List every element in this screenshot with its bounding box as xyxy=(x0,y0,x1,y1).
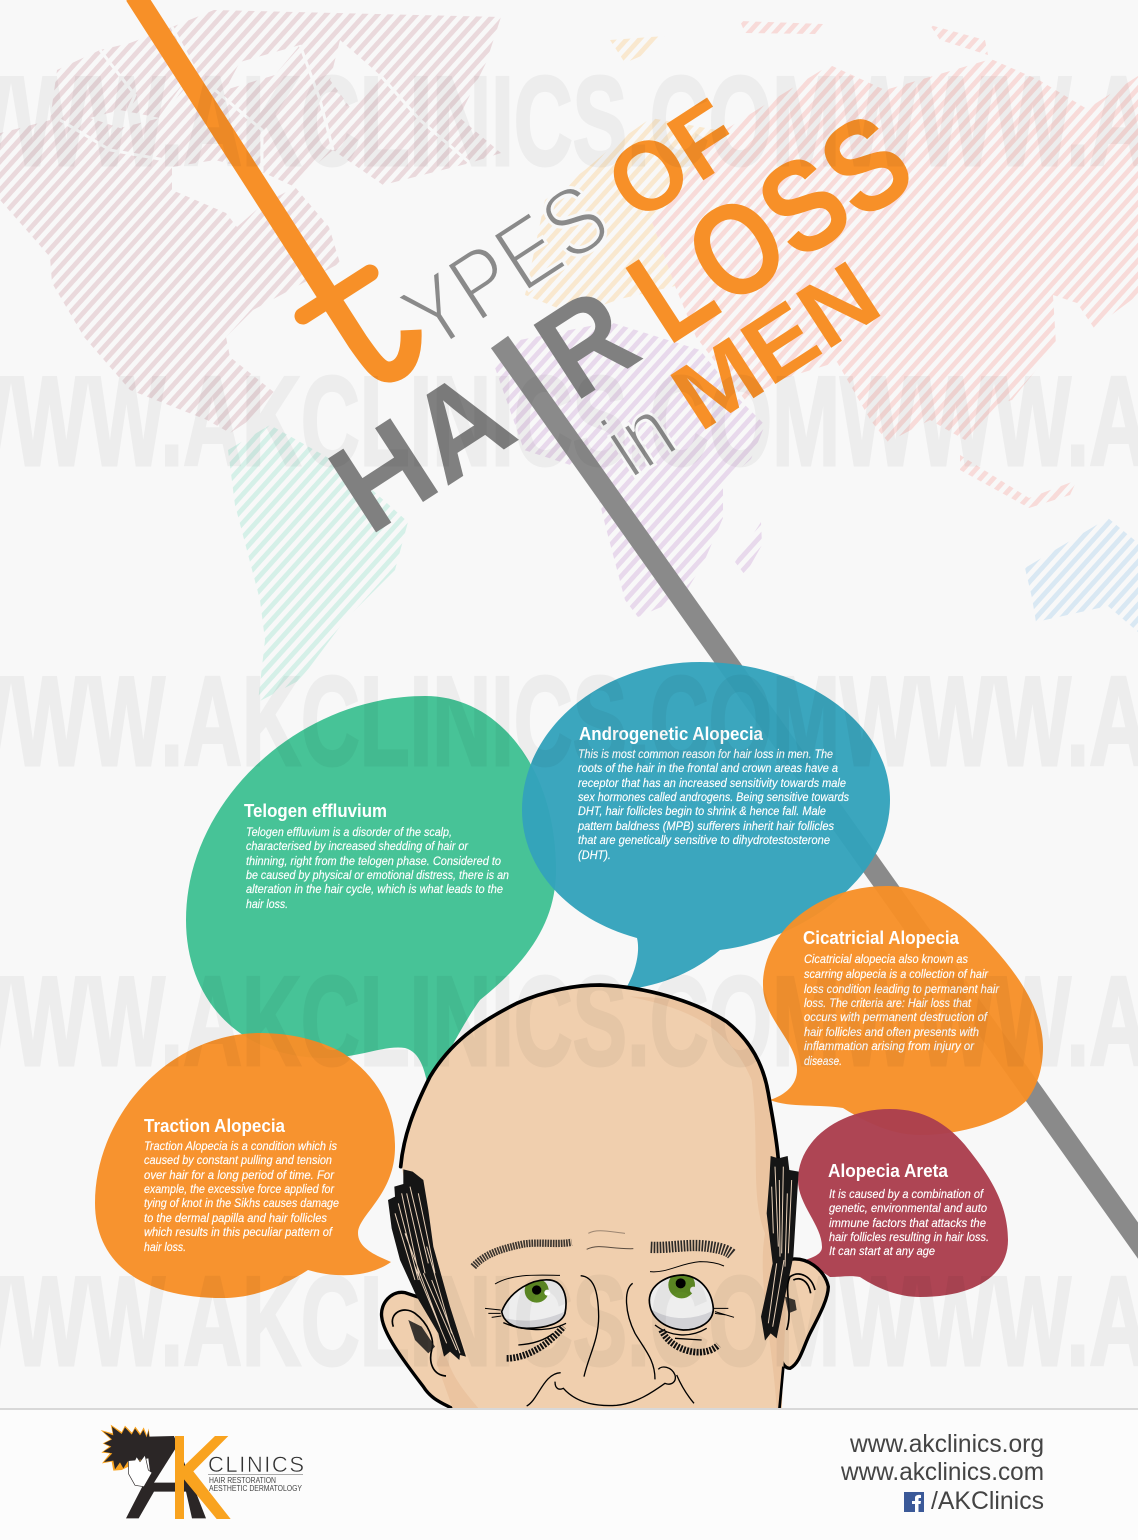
map: africa xyxy=(494,322,765,617)
title xyxy=(306,77,937,560)
body text: genetic, environmental and auto xyxy=(829,1201,987,1215)
map: asia xyxy=(651,21,1138,508)
body text: receptor that has an increased sensitivity towards male xyxy=(578,776,846,790)
body text: scarring alopecia is a collection of hair xyxy=(804,967,989,981)
body text: sex hormones called androgens. Being sensitive towards xyxy=(578,790,849,804)
map: north america xyxy=(0,10,501,433)
body text: (DHT). xyxy=(578,848,611,862)
body text: occurs with permanent destruction of xyxy=(804,1010,989,1024)
heading: Androgenetic Alopecia xyxy=(579,724,764,744)
logo face xyxy=(128,1455,152,1487)
body text: caused by constant pulling and tension xyxy=(144,1153,332,1167)
ear details xyxy=(392,1274,815,1376)
speech bubble: green xyxy=(186,696,556,1088)
hair: left side xyxy=(388,1169,466,1360)
logo counter of A xyxy=(154,1449,175,1483)
body text: DHT, hair follicles begin to shrink & hence fall. Male xyxy=(578,804,826,818)
heading: Alopecia Areta xyxy=(828,1161,949,1181)
title: HA: HA xyxy=(306,341,537,560)
orange letter t stroke xyxy=(135,0,411,372)
ear: left xyxy=(382,1292,470,1410)
skull and face xyxy=(402,985,788,1410)
t stem xyxy=(135,0,411,372)
body text: roots of the hair in the frontal and crown areas have a xyxy=(578,761,838,775)
logo: AK Clinics xyxy=(101,1425,304,1519)
body text: that are genetically sensitive to dihydrotestosterone xyxy=(578,833,830,847)
body text: hair follicles and often presents with xyxy=(804,1025,979,1039)
body text: loss. The criteria are: Hair loss that xyxy=(804,996,972,1010)
skin shading xyxy=(437,997,788,1410)
body text xyxy=(829,1187,989,1258)
body text: thinning, right from the telogen phase. Considered to xyxy=(246,854,501,868)
body text: to the dermal papilla and hair follicles xyxy=(144,1211,327,1225)
t crossbar xyxy=(303,273,370,316)
illustration: bald man's head xyxy=(382,985,828,1410)
body text: hair loss. xyxy=(144,1240,186,1254)
map: europe xyxy=(525,36,744,315)
map: hudson bay and arctic gaps xyxy=(0,40,420,400)
skull outline xyxy=(401,985,778,1167)
logo wordmark: CLINICS xyxy=(208,1452,304,1477)
body text: loss condition leading to permanent hair xyxy=(804,982,1000,996)
nostrils and mouth area xyxy=(527,1367,694,1406)
panel: telogen effluvium xyxy=(186,696,556,1088)
body text: inflammation arising from injury or xyxy=(804,1039,975,1053)
map: australia xyxy=(1025,518,1138,632)
body text: Cicatricial alopecia also known as xyxy=(804,952,968,966)
body text xyxy=(577,747,849,862)
body text xyxy=(246,825,509,911)
body text: This is most common reason for hair loss in men. The xyxy=(578,747,833,761)
heading: Traction Alopecia xyxy=(144,1116,286,1136)
gray diagonal line forming I of HAIR xyxy=(500,342,1138,1266)
body text xyxy=(144,1139,339,1254)
forehead wrinkles xyxy=(588,1231,625,1233)
speech bubble: orange xyxy=(763,886,1043,1135)
panel: traction alopecia xyxy=(95,1033,395,1298)
panel: alopecia areta xyxy=(798,1109,1008,1297)
nose xyxy=(581,1276,599,1377)
panel: cicatricial alopecia xyxy=(763,886,1043,1135)
body text: hair follicles resulting in hair loss. xyxy=(829,1230,989,1244)
panel: androgenetic alopecia xyxy=(522,662,890,990)
face edge lower right xyxy=(779,1367,783,1410)
logo letter A and hair xyxy=(103,1427,206,1518)
eye: right xyxy=(649,1262,734,1352)
logo tagline 1: HAIR RESTORATION xyxy=(209,1476,276,1485)
title: MEN: MEN xyxy=(654,241,897,450)
body text: Traction Alopecia is a condition which is xyxy=(144,1139,337,1153)
eyebrow: right xyxy=(651,1246,733,1255)
title: R: R xyxy=(512,261,661,426)
facebook handle: /AKClinics xyxy=(931,1487,1044,1515)
body text: be caused by physical or emotional distress, there is an xyxy=(246,868,509,882)
logo tagline 2: AESTHETIC DERMATOLOGY xyxy=(209,1484,303,1493)
title: in: in xyxy=(586,379,692,497)
speech bubble: crimson xyxy=(798,1109,1008,1297)
logo hair orange edge xyxy=(101,1425,150,1471)
body text: Telogen effluvium is a disorder of the scalp, xyxy=(246,825,452,839)
heading: Telogen effluvium xyxy=(244,801,387,821)
title: LOSS: LOSS xyxy=(604,84,937,370)
logo letter K xyxy=(175,1436,231,1519)
ear shadow hatching xyxy=(408,1297,797,1353)
body text: alteration in the hair cycle, which is what leads to the xyxy=(246,882,503,896)
title: OF: OF xyxy=(588,77,758,242)
speech bubble: blue xyxy=(522,662,890,990)
hair: right side xyxy=(761,1156,799,1341)
body text: which results in this peculiar pattern of xyxy=(144,1225,334,1239)
body text: It can start at any age xyxy=(829,1244,935,1258)
body text: disease. xyxy=(804,1054,842,1068)
world map background xyxy=(0,10,1138,702)
map: south america xyxy=(228,425,408,702)
icon: facebook xyxy=(904,1492,924,1512)
body text: It is caused by a combination of xyxy=(829,1187,985,1201)
body text: tying of knot in the Sikhs causes damage xyxy=(144,1196,339,1210)
title: YPES: YPES xyxy=(384,162,627,372)
eye: left xyxy=(485,1275,568,1358)
body text: characterised by increased shedding of hair or xyxy=(246,839,469,853)
body text: immune factors that attacks the xyxy=(829,1216,986,1230)
ear: right xyxy=(781,1259,828,1368)
website: org: www.akclinics.org xyxy=(849,1430,1044,1458)
body text: over hair for a long period of time. For xyxy=(144,1168,335,1182)
body text: hair loss. xyxy=(246,897,288,911)
website: com: www.akclinics.com xyxy=(840,1458,1044,1486)
eyebrow: left xyxy=(473,1242,572,1267)
footer background xyxy=(0,1409,1138,1540)
heading: Cicatricial Alopecia xyxy=(803,928,960,948)
body text: example, the excessive force applied for xyxy=(144,1182,335,1196)
body text: pattern baldness (MPB) sufferers inherit hair follicles xyxy=(577,819,834,833)
speech bubble: orange xyxy=(95,1033,395,1298)
map: arctic cracks xyxy=(60,27,470,172)
footer xyxy=(0,1408,1138,1540)
body text xyxy=(804,952,1000,1068)
